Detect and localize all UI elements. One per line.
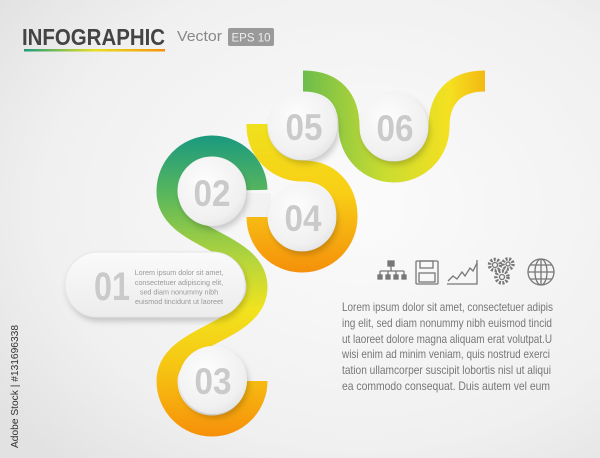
ribbon: top (05-06) <box>303 81 485 172</box>
circle 04: 04 <box>284 198 322 239</box>
watermark: vertical stock id: Adobe Stock | #131696338 <box>9 325 21 448</box>
circle 05 <box>269 92 337 160</box>
badge: EPS 10: EPS 10 <box>232 32 270 44</box>
body text <box>341 300 553 393</box>
circle 02: 02 <box>194 173 230 214</box>
badge: EPS 10 <box>228 28 274 46</box>
circle 02 <box>178 158 246 226</box>
icon: globe <box>528 259 554 285</box>
text block 01 <box>135 268 223 306</box>
circle 03 <box>179 346 247 414</box>
icons row <box>378 259 554 285</box>
body text: ea commodo consequat. Duis autem vel eum <box>342 379 550 393</box>
circle 04 <box>268 183 336 251</box>
pill: step 01 <box>65 252 245 317</box>
ribbon: middle (05-04) <box>257 124 347 262</box>
circle 05: 05 <box>286 107 322 148</box>
ribbon: lower (02-03) <box>167 146 257 426</box>
icon: floppy disk <box>416 261 438 284</box>
number 01: 01 <box>94 265 130 309</box>
text block 01: euismod tincidunt ut laoreet <box>135 297 223 306</box>
body text: tation ullamcorper suscipit lobortis nisl ut aliqui <box>342 363 551 377</box>
body text: ing elit, sed diam nonummy nibh euismod tincid <box>342 316 552 330</box>
text block 01: sed diam nonummy nibh <box>140 288 218 296</box>
title: INFOGRAPHIC <box>22 24 165 50</box>
body text: ut laoreet dolore magna aliquam erat volutpat.U <box>342 332 552 346</box>
text block 01: Lorem ipsum dolor sit amet, <box>135 268 223 277</box>
icon: gears <box>490 259 513 283</box>
circle 06 <box>360 93 428 161</box>
circle 03: 03 <box>194 361 232 402</box>
body text: wisi enim ad minim veniam, quis nostrud exerci <box>341 347 550 361</box>
text block 01: consectetuer adipiscing elit, <box>135 278 223 287</box>
icon: hierarchy <box>378 261 406 279</box>
icon: line chart <box>447 260 477 284</box>
subtitle: Vector: Vector <box>177 28 222 45</box>
body text: Lorem ipsum dolor sit amet, consectetuer adipis <box>342 300 553 314</box>
circle 06: 06 <box>376 108 414 149</box>
connector bar 02-04 <box>243 193 271 217</box>
